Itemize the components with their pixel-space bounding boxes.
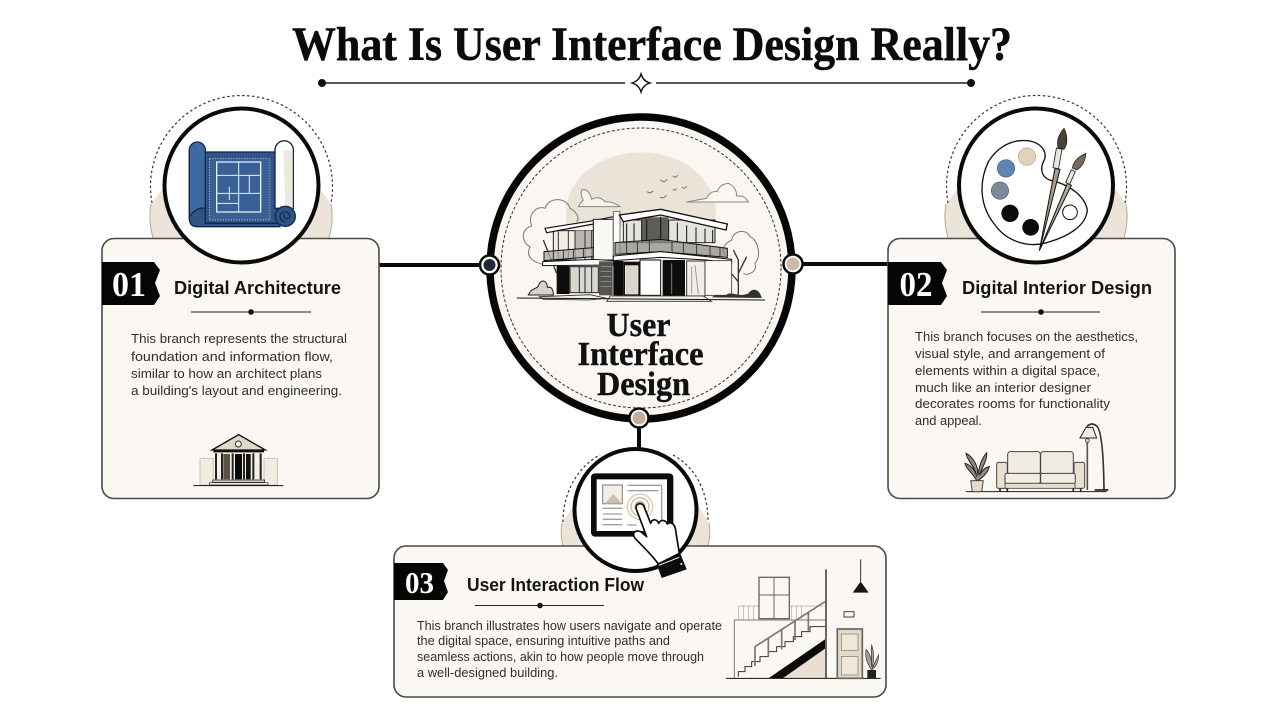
body text [131,332,347,398]
body text [915,330,1138,428]
number badge 01 [102,262,160,305]
connector lines [379,264,888,450]
body text: seamless actions, akin to how people move through [417,650,704,664]
panel: user interaction flow backdrop [561,455,710,546]
body text: visual style, and arrangement of [915,347,1106,361]
heading: Digital Architecture [174,278,341,298]
body text: the digital space, ensuring intuitive paths and [417,634,670,648]
body text: a building's layout and engineering. [131,384,342,398]
upper right wing [615,209,727,257]
title divider ornament [318,74,975,92]
panel: digital interior design backdrop [945,95,1127,238]
body text: decorates rooms for functionality [915,397,1111,411]
body text: similar to how an architect plans [131,367,322,381]
icon: tablet with pointing hand [591,473,687,578]
panel: card 03 user interaction flow [394,546,886,697]
body text [417,619,722,680]
illustration: sky, clouds and trees [523,152,759,297]
icon circle: paint palette [959,108,1113,262]
icon circle: blueprint [164,108,318,262]
floor slabs [543,259,613,266]
heading: User Interaction Flow [467,575,645,595]
number badge 03 [394,563,448,600]
heading divider [981,309,1100,315]
number badge 02: 02 [900,265,932,304]
number badge 03: 03 [405,565,434,600]
icon: palette and brushes [982,128,1087,251]
hub label: Interface [578,336,704,373]
panel: card 02 digital interior design [888,238,1175,498]
body text: elements within a digital space, [915,364,1100,378]
body text: This branch illustrates how users navigate and operate [417,619,722,633]
central hub circle [490,117,792,419]
body text: and appeal. [915,414,982,428]
hub label: Design [597,366,690,403]
body text: This branch represents the structural [131,332,347,346]
body text: a well-designed building. [417,666,558,680]
icon: staircase interior [726,559,881,678]
heading: Digital Interior Design [962,278,1152,298]
icon: classical building [193,435,283,486]
panel: digital architecture backdrop [150,96,332,238]
body text: foundation and information flow, [131,350,333,364]
connector node bottom [630,408,648,428]
steps and landscaping [517,281,765,301]
title: What Is User Interface Design Really? [292,18,1012,71]
body text: This branch focuses on the aesthetics, [915,330,1138,344]
heading divider [191,309,311,315]
icon circle: tablet touch [574,449,696,578]
connector node right [784,254,802,274]
panel: card 01 digital architecture [102,238,379,498]
number badge 02 [888,262,947,305]
ground floor [557,260,732,297]
hub label: User [606,307,670,344]
icon: blueprint scroll [189,141,295,227]
body text: much like an interior designer [915,381,1091,395]
upper left wing [544,217,613,261]
hub label [578,307,704,403]
connector node left [480,256,499,274]
illustration: modern house [517,209,765,301]
heading divider [475,603,604,608]
number badge 01: 01 [112,265,146,304]
icon: sofa, plant and lamp [965,424,1108,492]
